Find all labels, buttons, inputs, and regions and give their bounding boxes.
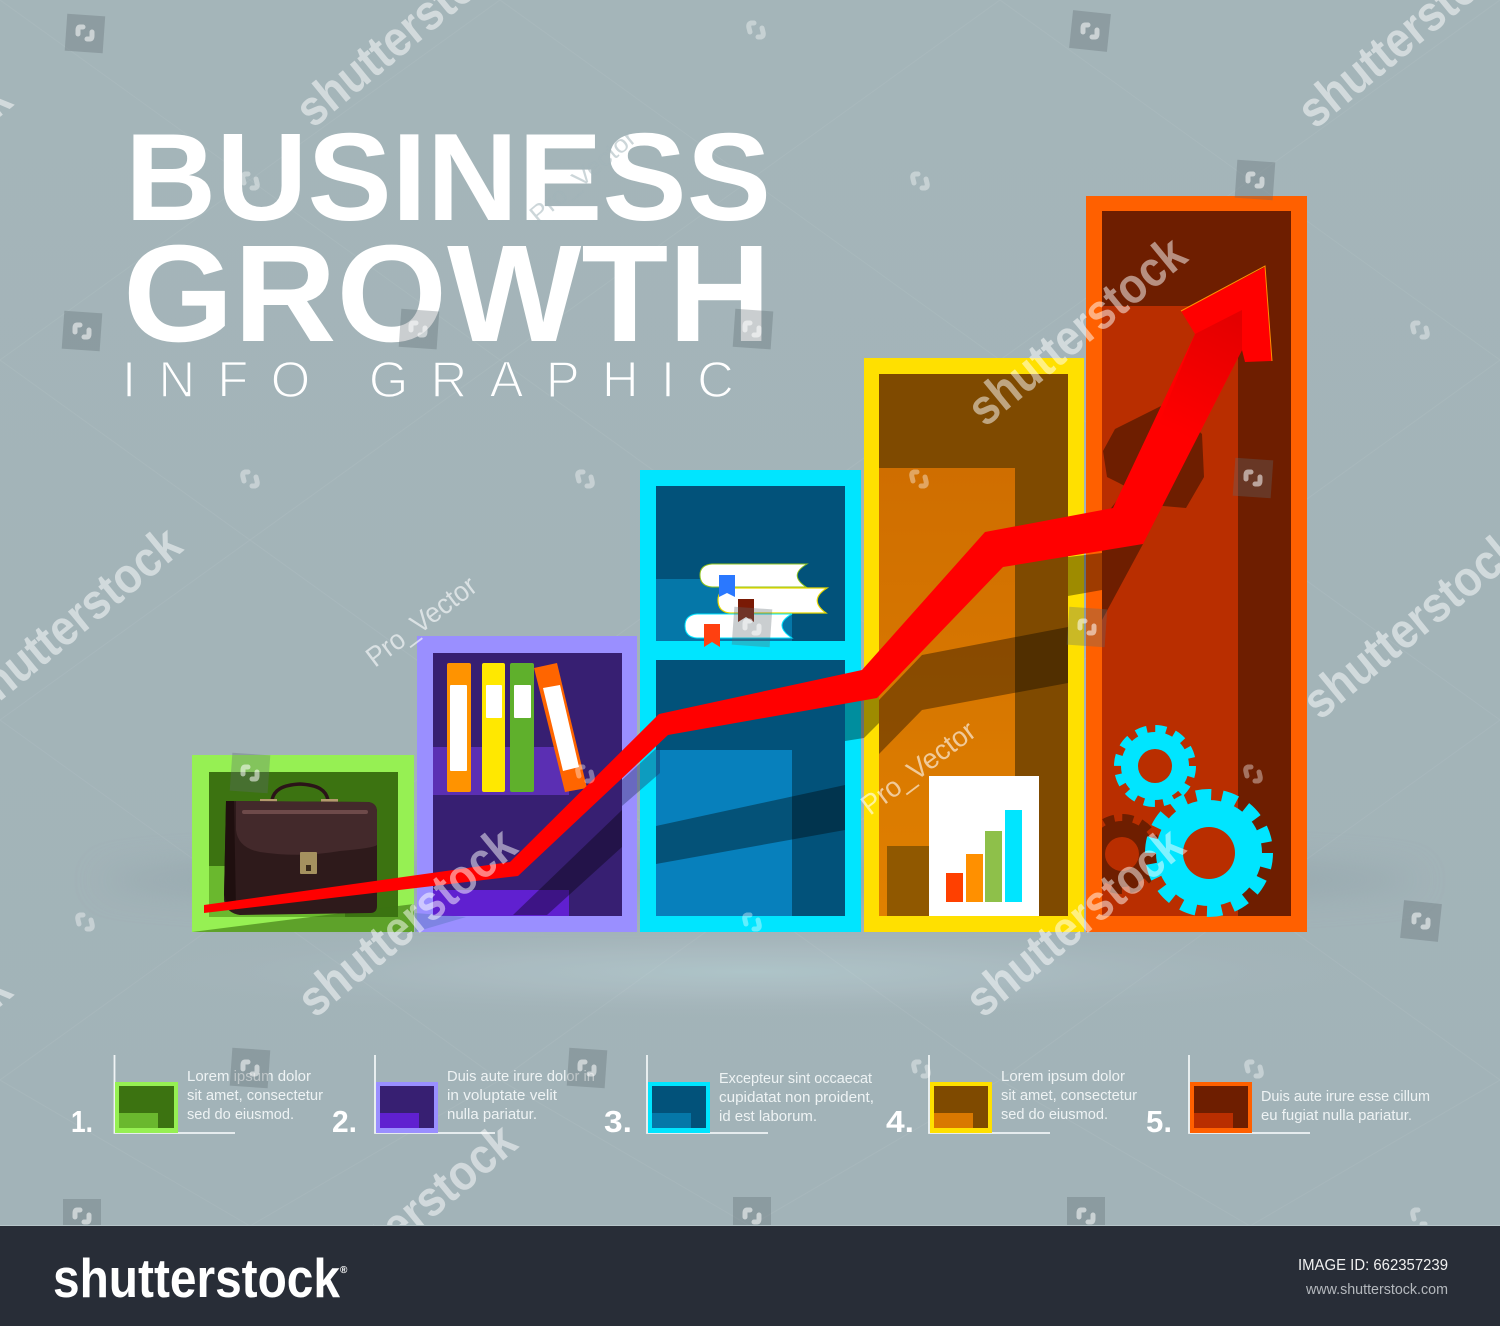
bar 3: books xyxy=(640,470,861,932)
legend item 5 xyxy=(1146,1055,1430,1139)
icon: stacked books xyxy=(685,564,827,647)
bar 4: report xyxy=(864,358,1084,932)
title line: GROWTH: GROWTH xyxy=(123,217,771,371)
legend item 3: id est laborum. xyxy=(719,1108,817,1125)
legend item 5: Duis aute irure esse cillum xyxy=(1261,1088,1430,1105)
legend item 1: 1. xyxy=(71,1104,93,1139)
image id: www.shutterstock.com xyxy=(1305,1282,1448,1298)
legend xyxy=(71,1055,1430,1139)
legend item 1: Lorem ipsum dolor xyxy=(187,1068,311,1085)
floor shadow and glow xyxy=(100,856,1420,1020)
footer bar xyxy=(0,1225,1500,1326)
image id: IMAGE ID: 662357239 xyxy=(1298,1257,1448,1274)
watermarks: shutterstock xyxy=(286,816,527,1028)
legend item 3: cupidatat non proident, xyxy=(719,1089,874,1106)
legend item 3 xyxy=(604,1055,874,1139)
watermarks: shutterstock xyxy=(954,816,1195,1028)
legend item 3: 3. xyxy=(604,1104,632,1139)
legend item 1 xyxy=(71,1055,323,1139)
legend item 4 xyxy=(886,1055,1137,1139)
icon: gears xyxy=(1086,729,1267,911)
legend item 5: 5. xyxy=(1146,1104,1172,1139)
watermarks: shutterstock xyxy=(286,1112,527,1324)
bar 5: gears xyxy=(1086,196,1307,932)
image id xyxy=(1298,1257,1448,1298)
bar chart xyxy=(192,196,1307,932)
legend item 2: nulla pariatur. xyxy=(447,1106,537,1123)
icon: binders xyxy=(447,663,587,792)
legend item 2: Duis aute irure dolor in xyxy=(447,1068,595,1085)
footer logo: ® xyxy=(340,1265,348,1276)
watermarks: Pro_Vector xyxy=(525,124,641,229)
legend item 2 xyxy=(332,1055,595,1139)
watermarks: Pro_Vector xyxy=(855,715,981,821)
title xyxy=(122,109,771,408)
title line: BUSINESS: BUSINESS xyxy=(125,109,771,247)
subtitle: INFO GRAPHIC xyxy=(122,351,734,408)
legend item 2: in voluptate velit xyxy=(447,1087,558,1104)
legend item 2: 2. xyxy=(332,1104,357,1139)
legend item 1: sit amet, consectetur xyxy=(187,1087,323,1104)
legend item 4: sed do eiusmod. xyxy=(1001,1106,1108,1123)
legend item 4: Lorem ipsum dolor xyxy=(1001,1068,1125,1085)
legend item 4: 4. xyxy=(886,1104,914,1139)
legend item 5: eu fugiat nulla pariatur. xyxy=(1261,1107,1412,1124)
footer logo: shutterstock xyxy=(53,1247,340,1309)
watermarks: shutterstock xyxy=(956,225,1197,437)
icon: report sheet with bar chart xyxy=(929,776,1039,916)
arrow shadow xyxy=(513,553,1102,915)
legend item 3: Excepteur sint occaecat xyxy=(719,1070,873,1087)
bar 1: briefcase xyxy=(192,755,414,932)
legend item 1: sed do eiusmod. xyxy=(187,1106,294,1123)
growth arrow xyxy=(204,266,1272,913)
legend item 4: sit amet, consectetur xyxy=(1001,1087,1137,1104)
watermarks: Pro_Vector xyxy=(360,570,482,673)
bar 2: binders xyxy=(415,636,637,932)
icon: briefcase xyxy=(224,784,377,915)
